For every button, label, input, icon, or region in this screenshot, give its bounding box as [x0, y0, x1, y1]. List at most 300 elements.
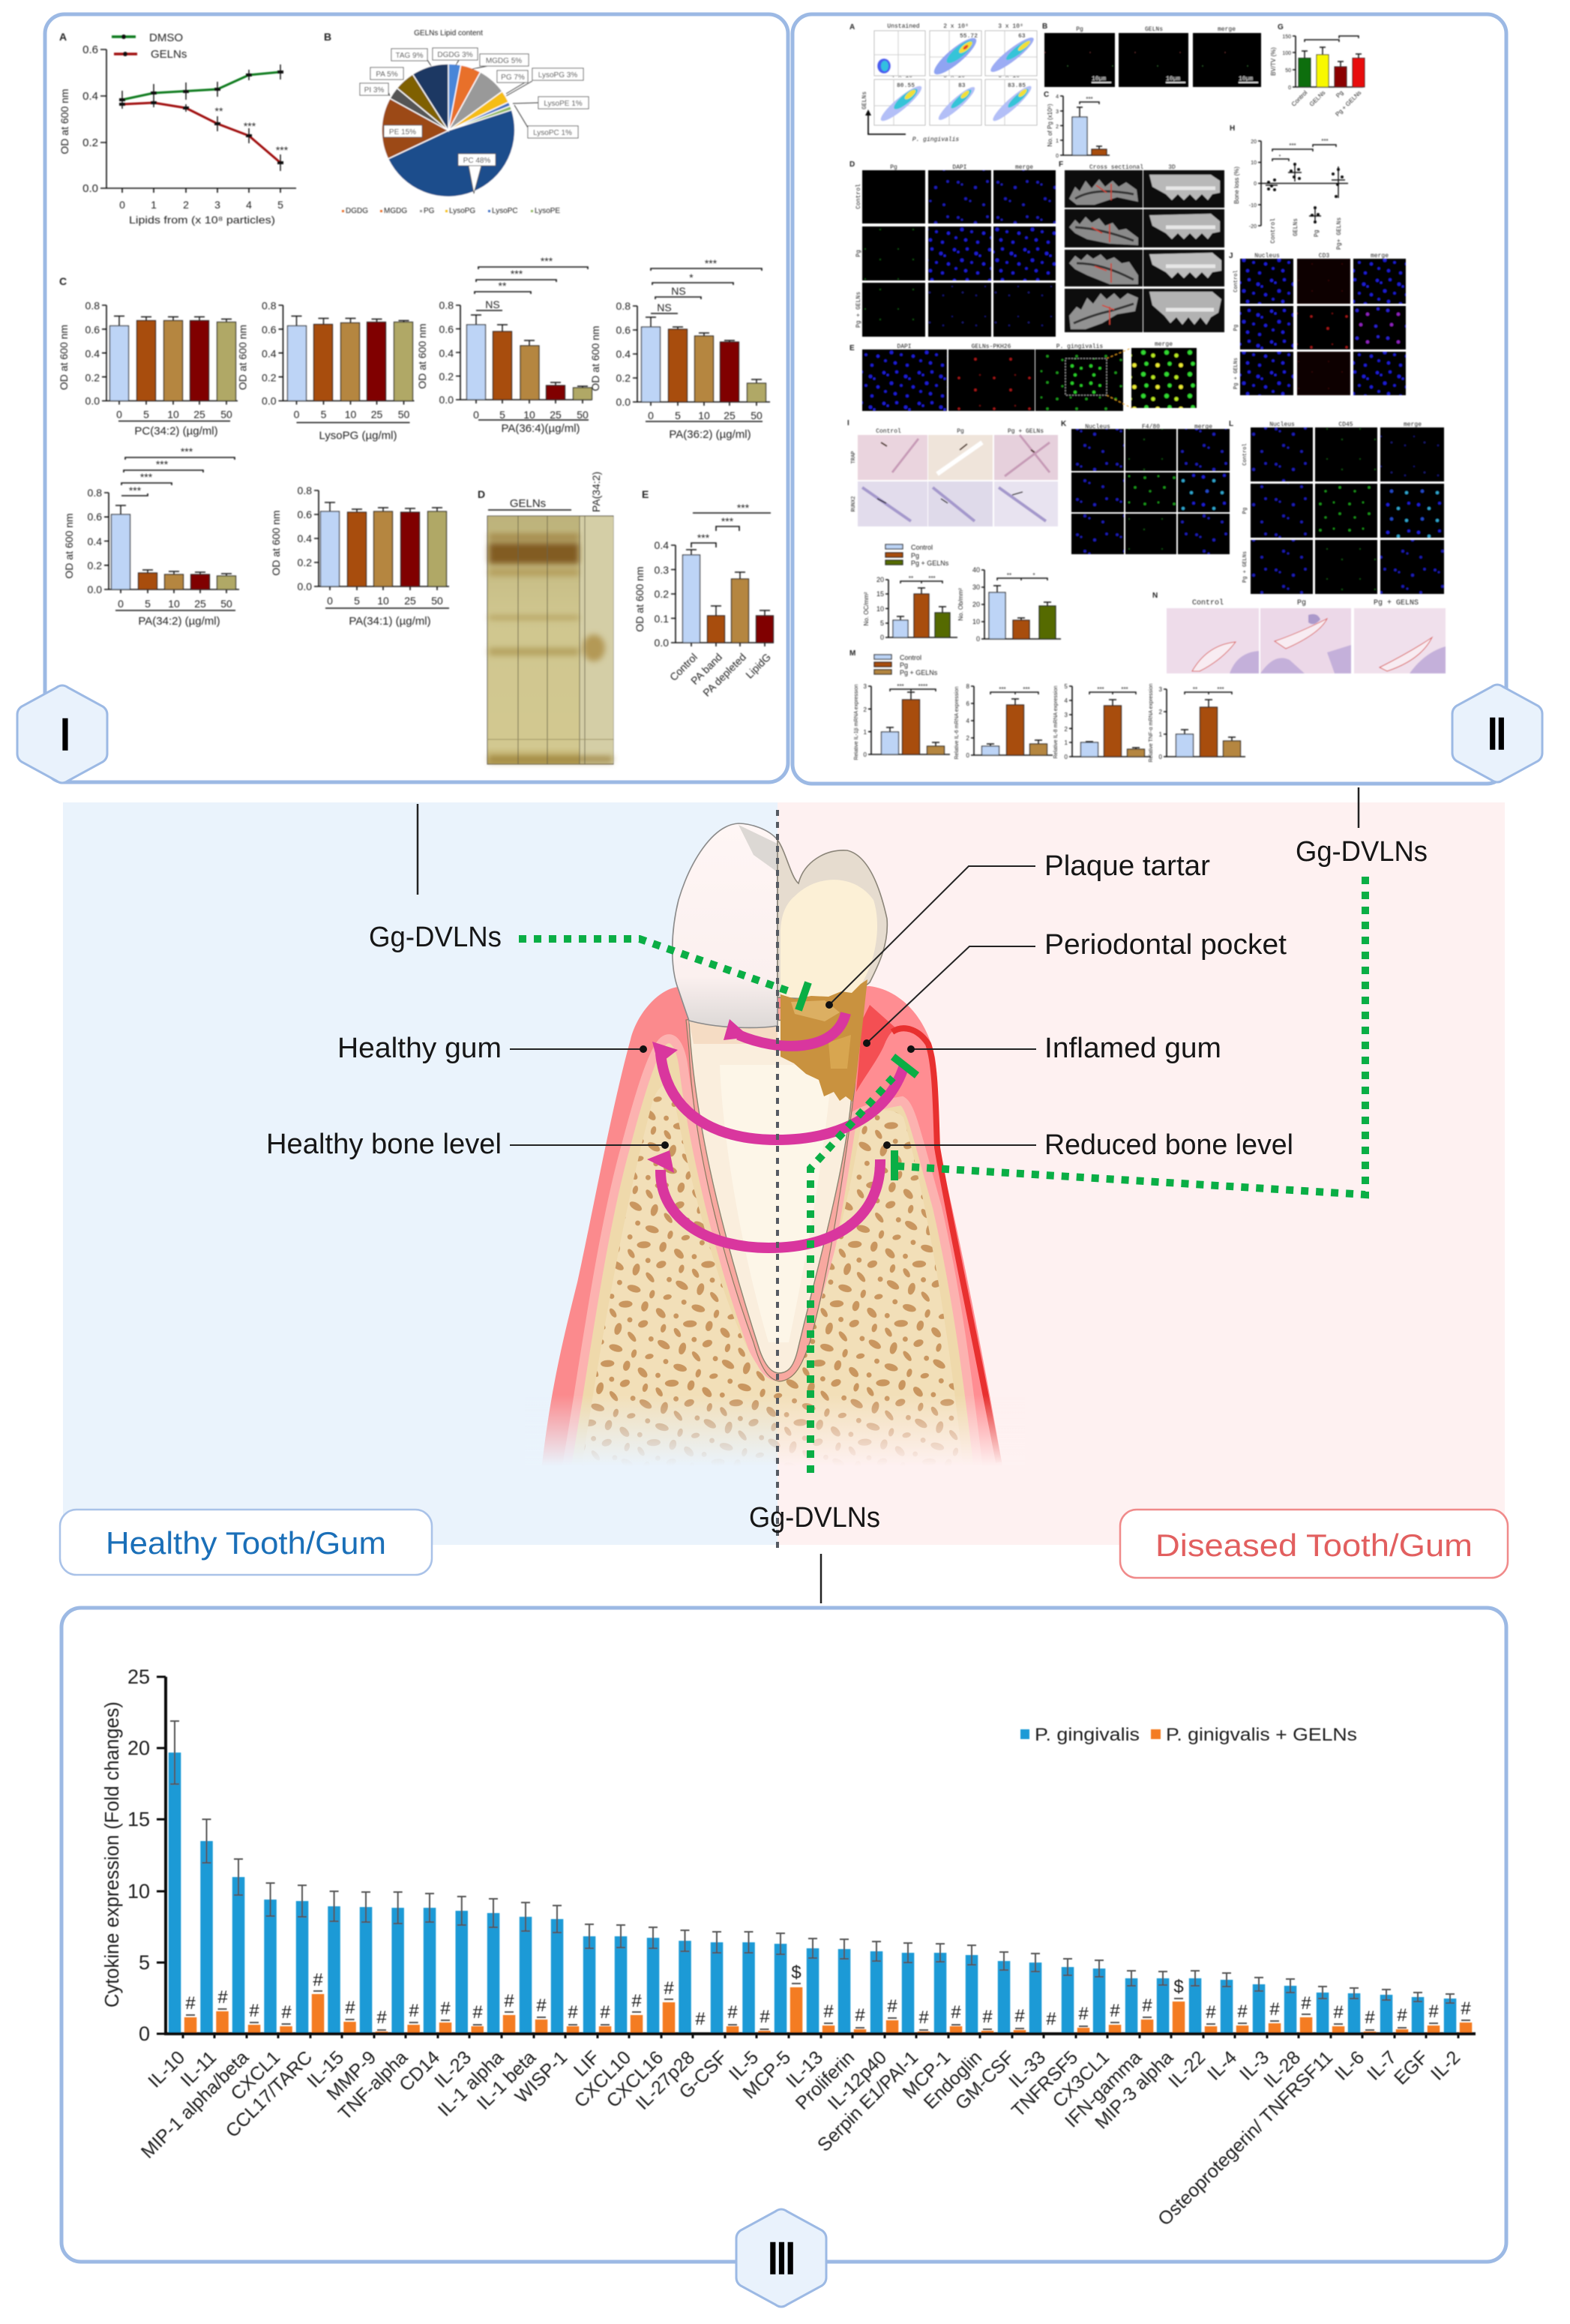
- category labels: IL-12p40: [824, 2047, 891, 2114]
- sub-panel G: BV/TV bars: GELNs: [1308, 89, 1326, 108]
- sub-panel C: Pg counts: 4: [1056, 94, 1059, 100]
- sub-panel G: BV/TV bars: BV/TV (%): [1270, 47, 1277, 76]
- chart A: growth curve: GELNs: [151, 48, 187, 61]
- chart: IL-6 mRNA: 6: [966, 700, 970, 707]
- chart: IL-1 beta mRNA: [854, 683, 950, 760]
- sub-panel L: CD4 staining: Nucleus: [1269, 421, 1295, 428]
- y-axis labels: 20: [127, 1737, 150, 1759]
- chart B: lipid pie: DGDG: [346, 207, 368, 215]
- sub-panel C: Pg counts: [1044, 91, 1110, 159]
- chart B: lipid pie: PA 5%: [376, 70, 398, 79]
- chart: PC(34:2): 10: [167, 408, 179, 420]
- chart: No. Ob/mm2: 20: [972, 601, 980, 608]
- category labels: CXCL1: [226, 2047, 284, 2104]
- sub-panel H: bone loss scatter: Bone loss (%): [1233, 166, 1240, 204]
- significance markers: #: [1142, 1996, 1152, 2016]
- chart: IL-8 mRNA: ***: [1121, 686, 1128, 693]
- chart B: lipid pie: LysoPG 3%: [538, 71, 577, 79]
- chart: PC(34:2): 0.0: [85, 394, 100, 406]
- inflamed pocket: [856, 1005, 897, 1092]
- sub-panel G: BV/TV bars: Pg + GELNs: [1334, 89, 1362, 118]
- chart A: growth curve: 0: [119, 199, 125, 211]
- chart: LysoPG: [237, 300, 414, 442]
- chart: PA(36:2): 0.6: [616, 324, 631, 336]
- chart: No. OC/mm2: ***: [928, 575, 936, 582]
- hexagon badge II: II: [1486, 709, 1504, 759]
- chart: PA(34:2): 0.0: [88, 583, 102, 595]
- category labels: IL-2: [1427, 2047, 1464, 2085]
- chart A: growth curve: 0.2: [82, 136, 98, 149]
- sub-panel H: bone loss scatter: Pg+ GELNs: [1336, 217, 1343, 250]
- inflamed gum outer band: [892, 1028, 999, 1462]
- sub-panel H: bone loss scatter: 10: [1251, 160, 1257, 166]
- y-axis labels: 15: [127, 1808, 150, 1831]
- chart: No. Ob/mm2: *: [1032, 572, 1035, 579]
- button: diseased: Diseased Tooth/Gum: [1155, 1528, 1473, 1563]
- sub-panel K: F4/80 staining: merge: [1194, 424, 1212, 430]
- chart: PA(34:2): 0.2: [88, 559, 102, 571]
- chart D: TLC plate: D: [478, 488, 485, 500]
- chart: No. Ob/mm2: 0: [976, 635, 980, 643]
- chart B: lipid pie: DGDG 3%: [437, 51, 473, 59]
- sub-panel A: flow plots: 4 x 10⁸: [891, 73, 916, 79]
- chart: PA(36:4): ***: [511, 268, 523, 280]
- sub-panel E: co-localisation: DAPI: [897, 343, 912, 350]
- sub-panel L: CD4 staining: [1229, 420, 1444, 594]
- sub-panel A: flow plots: [849, 23, 1037, 143]
- sub-panel K: F4/80 staining: F4/80: [1142, 424, 1160, 430]
- category labels: Endoglin: [920, 2047, 986, 2113]
- button: diseased: [1120, 1510, 1508, 1578]
- significance markers: #: [281, 2002, 292, 2023]
- sub-panel C: Pg counts: No. of Pg (x10⁵): [1047, 103, 1053, 147]
- sub-panel I: histology: RUNX2: [851, 496, 857, 512]
- chart: LysoPG: LysoPG (µg/ml): [319, 429, 397, 442]
- significance markers: #: [887, 1996, 897, 2017]
- chart A: growth curve: 0.6: [82, 43, 98, 56]
- chart B: lipid pie: PG: [424, 207, 435, 215]
- chart: PA(34:1): 0.0: [298, 580, 312, 592]
- y-axis labels: 5: [139, 1951, 150, 1974]
- cytokine bar chart: [102, 1666, 1476, 2230]
- sub-panel D: tissue fluorescence: merge: [1015, 164, 1033, 171]
- category labels: IL-33: [1005, 2047, 1050, 2092]
- sub-panel D: tissue fluorescence: Pg: [855, 250, 862, 257]
- chart: IL-1 beta mRNA: 0: [864, 751, 867, 758]
- chart: PC(34:2): 25: [193, 408, 205, 420]
- chart: LysoPG: 50: [398, 408, 409, 420]
- category labels: IL-3: [1236, 2047, 1273, 2085]
- chart: TNF-alpha mRNA: 3: [1159, 686, 1163, 693]
- chart: PA(34:1): 0: [327, 595, 333, 607]
- chart B: lipid pie: B: [324, 31, 331, 43]
- y-axis labels: 25: [127, 1666, 150, 1688]
- background: healthy side: [63, 802, 778, 1545]
- sub-panel H: bone loss scatter: -20: [1249, 224, 1257, 229]
- chart: PA(36:4): ***: [541, 255, 553, 267]
- sub-panel B: fluorescence: 10µm: [1166, 76, 1180, 82]
- chart: IL-1 beta mRNA: 1: [864, 729, 867, 736]
- chart E: PA fractions: 0.1: [655, 613, 669, 625]
- significance markers: #: [568, 2002, 578, 2023]
- significance markers: #: [982, 2007, 993, 2027]
- connector: panel III to label: [820, 1554, 822, 1603]
- labels: anatomy: Gg-DVLNs: [1296, 836, 1428, 868]
- chart: PA(36:2): PA(36:2) (µg/ml): [669, 428, 751, 441]
- sub-panel G: BV/TV bars: [1270, 23, 1365, 118]
- chart D: TLC plate: [478, 472, 613, 764]
- category labels: CCL17/TARC: [222, 2047, 316, 2142]
- y-axis labels: 10: [127, 1880, 150, 1903]
- sub-panel A: flow plots: 3 x 10⁸: [998, 23, 1023, 30]
- sub-panel N: H and E sections: Pg + GELNS: [1374, 599, 1419, 607]
- sub-panel A: flow plots: GELNs: [861, 91, 868, 109]
- chart: IL-8 mRNA: 3: [1065, 712, 1068, 718]
- y-axis labels: [102, 1666, 150, 2045]
- chart A: growth curve: 3: [214, 199, 220, 211]
- legend: osteoclast charts: Control: [911, 544, 933, 551]
- category labels: Osteoprotegerin/ TNFRSF11: [1154, 2047, 1337, 2230]
- sub-panel C: Pg counts: 0: [1056, 154, 1059, 159]
- background: diseased side: [778, 802, 1505, 1545]
- chart: PA(34:1): 0.2: [298, 556, 312, 568]
- sub-panel I: histology: TRAP: [851, 451, 857, 463]
- chart E: PA fractions: 0.0: [655, 637, 669, 649]
- chart B: lipid pie: GELNs Lipid content: [414, 29, 483, 37]
- chart: PA(36:2): 0.4: [616, 348, 631, 360]
- category labels: IL-6: [1331, 2047, 1368, 2085]
- category labels: MMP-9: [322, 2047, 380, 2104]
- chart: No. OC/mm2: **: [909, 575, 913, 582]
- chart A: growth curve: 1: [151, 199, 157, 211]
- sub-panel E: co-localisation: E: [849, 344, 855, 352]
- sub-panel A: flow plots: 2 x 10⁸: [943, 23, 969, 30]
- chart: PA(36:4): 0.6: [439, 323, 454, 335]
- chart B: lipid pie: MGDG: [384, 207, 407, 215]
- chart: PA(34:1): 5: [354, 595, 360, 607]
- sub-panel G: BV/TV bars: 100: [1282, 51, 1291, 56]
- chart E: PA fractions: [634, 488, 774, 699]
- crown left: [673, 823, 778, 1027]
- category labels: IL-23: [430, 2047, 475, 2092]
- sub-panel M: mRNA legend: Pg + GELNs: [900, 669, 938, 676]
- chart: IL-6 mRNA: 0: [966, 752, 970, 759]
- category labels: GM-CSF: [951, 2047, 1018, 2114]
- significance markers: #: [664, 1978, 674, 1999]
- chart: PA(36:2): 25: [724, 409, 736, 421]
- chart: PA(36:4): 0.8: [439, 299, 454, 311]
- chart: PA(36:2): 0: [648, 409, 654, 421]
- chart: IL-8 mRNA: 4: [1065, 697, 1068, 704]
- blue error bars: [170, 1721, 1455, 2003]
- labels: anatomy: Inflamed gum: [1044, 1033, 1221, 1064]
- chart: PA(36:4): PA(36:4)(µg/ml): [501, 422, 580, 435]
- category labels: G-CSF: [675, 2047, 731, 2103]
- chart: PA(34:1): [270, 484, 449, 628]
- fade at base: [525, 1395, 778, 1479]
- chart: PA(34:2): 5: [145, 598, 151, 610]
- chart: IL-1 beta mRNA: ***: [897, 683, 904, 690]
- category labels: CD14: [395, 2047, 444, 2095]
- sub-panel J: CD3 staining: Pg + GELNs: [1233, 358, 1239, 389]
- chart: PA(36:2): 10: [698, 409, 710, 421]
- category labels: Serpin E1/PAI-1: [813, 2047, 922, 2156]
- sub-panel K: F4/80 staining: Nucleus: [1085, 424, 1110, 430]
- sub-panel J: CD3 staining: CD3: [1319, 253, 1329, 259]
- hexagon badge II: [1452, 685, 1542, 782]
- sub-panel J: CD3 staining: Nucleus: [1254, 253, 1280, 259]
- category labels: IL-4: [1203, 2047, 1241, 2085]
- chart: No. OC/mm2: [863, 575, 957, 641]
- sub-panel F: micro-CT: F: [1059, 160, 1063, 169]
- chart: PA(34:2): PA(34:2) (µg/ml): [138, 615, 220, 628]
- sub-panel D: tissue fluorescence: [849, 160, 1056, 337]
- sub-panel L: CD4 staining: Control: [1242, 443, 1248, 466]
- crown right: [778, 840, 887, 1001]
- sub-panel G: BV/TV bars: G: [1278, 23, 1284, 31]
- sub-panel L: CD4 staining: Pg + GELNs: [1242, 551, 1248, 583]
- sub-panel B: fluorescence: Pg: [1076, 26, 1083, 33]
- chart: PA(36:2): 0.2: [616, 372, 631, 384]
- chart: No. OC/mm2: 10: [876, 605, 884, 613]
- chart: IL-6 mRNA: 2: [966, 735, 970, 742]
- root canal tone: [720, 1065, 832, 1342]
- sub-panel I: histology: Pg: [957, 428, 964, 435]
- chart legend: P. ginigvalis + GELNs: [1166, 1725, 1357, 1745]
- significance markers: #: [1014, 2006, 1025, 2026]
- chart: PA(36:4): 50: [577, 409, 589, 421]
- hexagon badge III: [736, 2209, 826, 2307]
- sub-panel J: CD3 staining: J: [1229, 252, 1233, 260]
- category labels: IL-1 beta: [473, 2047, 540, 2114]
- chart: PA(36:2): 0.8: [616, 300, 631, 312]
- chart: PC(34:2): 0.8: [85, 300, 100, 312]
- chart: No. Ob/mm2: 40: [972, 566, 980, 574]
- magenta arrow: middle: [652, 1042, 904, 1140]
- chart E: PA fractions: 0.2: [655, 588, 669, 600]
- category labels: IL-10: [144, 2047, 189, 2092]
- axes: [166, 1677, 1476, 2034]
- chart: PA(34:2): 50: [220, 598, 232, 610]
- category labels: TNFRSF5: [1008, 2047, 1082, 2122]
- centre divider: [776, 810, 779, 1551]
- sub-panel N: H and E sections: N: [1152, 592, 1158, 600]
- chart: PA(36:2): NS: [657, 301, 672, 313]
- significance markers: #: [600, 2002, 610, 2023]
- chart E: PA fractions: E: [642, 488, 649, 500]
- chart: PA(36:4): 0.2: [439, 370, 454, 382]
- significance markers: #: [951, 2002, 961, 2023]
- chart: PC(34:2): 5: [143, 408, 149, 420]
- sub-panel A: flow plots: 83: [958, 82, 966, 89]
- connector: panel II to label: [1358, 787, 1359, 828]
- chart B: lipid pie: [324, 29, 589, 215]
- chart: PA(36:4): **: [499, 280, 507, 292]
- chart: IL-6 mRNA: 8: [966, 683, 970, 690]
- sub-panel M: mRNA legend: Control: [900, 654, 921, 661]
- chart: No. OC/mm2: 0: [880, 634, 884, 641]
- sub-panel J: CD3 staining: [1229, 252, 1406, 395]
- sub-panel H: bone loss scatter: ***: [1289, 142, 1296, 149]
- orange bars: [184, 1987, 1472, 2034]
- chart: PA(34:2): ***: [156, 458, 169, 470]
- sub-panel I: histology: [847, 419, 1058, 526]
- sub-panel F: micro-CT: [1059, 160, 1224, 332]
- sub-panel J: CD3 staining: merge: [1371, 253, 1389, 259]
- chart: IL-8 mRNA: 5: [1065, 683, 1068, 690]
- sub-panel H: bone loss scatter: [1230, 124, 1348, 250]
- sub-panel I: histology: I: [847, 419, 849, 427]
- chart legend: [1020, 1725, 1357, 1745]
- sub-panel A: flow plots: 55.72: [960, 33, 978, 40]
- category labels: MIP-3 alpha: [1091, 2047, 1177, 2134]
- sub-panel A: flow plots: Unstained: [887, 23, 920, 30]
- gum right half: [778, 986, 1003, 1470]
- chart D: TLC plate: GELNs: [510, 497, 546, 510]
- chart: PC(34:2): 0: [116, 408, 122, 420]
- chart: PA(36:2): ***: [705, 257, 718, 269]
- significance markers: #: [345, 1998, 355, 2018]
- chart B: lipid pie: PG 7%: [501, 73, 525, 82]
- chart E: PA fractions: 0.4: [655, 539, 669, 551]
- sub-panel L: CD4 staining: merge: [1404, 421, 1422, 428]
- chart: PA(34:2): 0.4: [88, 535, 102, 547]
- significance markers: #: [249, 2001, 259, 2021]
- chart: No. OC/mm2: No. OC/mm²: [863, 592, 870, 625]
- significance markers: #: [1461, 1999, 1471, 2019]
- chart: PA(34:2): OD at 600 nm: [63, 513, 75, 579]
- chart E: PA fractions: OD at 600 nm: [634, 566, 646, 632]
- significance markers: #: [1301, 1993, 1311, 2014]
- chart A: growth curve: **: [215, 105, 223, 117]
- chart: PA(34:1): OD at 600 nm: [270, 510, 282, 576]
- sub-panel B: fluorescence: 10µm: [1092, 76, 1106, 82]
- chart: No. Ob/mm2: **: [1007, 572, 1011, 579]
- chart A: growth curve: ***: [244, 120, 256, 132]
- chart A: growth curve: 4: [246, 199, 252, 211]
- sub-panel H: bone loss scatter: -10: [1249, 203, 1257, 208]
- chart: PA(34:1): 25: [404, 595, 416, 607]
- chart: PA(34:1): 0.4: [298, 532, 312, 544]
- chart B: lipid pie: LysoPG: [449, 207, 475, 215]
- chart: LysoPG: 0.4: [262, 348, 277, 360]
- chart: TNF-alpha mRNA: **: [1193, 686, 1197, 693]
- chart: LysoPG: 0.6: [262, 324, 277, 336]
- sub-panel E: co-localisation: [849, 341, 1197, 411]
- sub-panel G: BV/TV bars: 50: [1285, 68, 1291, 73]
- category labels: IL-22: [1164, 2047, 1209, 2092]
- chart: PA(34:2): ***: [129, 484, 142, 496]
- legend: osteoclast charts: Pg: [911, 552, 919, 559]
- periodontal ligament: [686, 997, 862, 1381]
- chart: IL-8 mRNA: ***: [1097, 686, 1104, 693]
- sub-panel H: bone loss scatter: Control: [1270, 218, 1277, 244]
- chart: IL-8 mRNA: Relative IL-8 mRNA expression: [1053, 685, 1059, 759]
- chart B: lipid pie: LysoPC: [492, 207, 518, 215]
- chart: No. Ob/mm2: 30: [972, 583, 980, 591]
- chart: PA(36:2): *: [689, 271, 694, 283]
- chart A: growth curve: ***: [276, 144, 289, 156]
- chart A: growth curve: OD at 600 nm: [58, 88, 70, 154]
- significance markers: #: [695, 2009, 706, 2029]
- sub-panel C: Pg counts: 1: [1056, 139, 1059, 144]
- sub-panel H: bone loss scatter: H: [1230, 124, 1235, 133]
- chart: No. Ob/mm2: [957, 566, 1061, 643]
- chart E: PA fractions: PA depleted: [700, 651, 748, 699]
- chart: PA(34:1): PA(34:1) (µg/ml): [349, 615, 431, 628]
- chart: TNF-alpha mRNA: [1149, 683, 1245, 763]
- hexagon badge I: [17, 685, 107, 783]
- connector: panel I to label: [417, 804, 418, 895]
- bone: [566, 1039, 978, 1470]
- blue bars: [169, 1753, 1456, 2034]
- panel I: lipid analysis: [45, 14, 788, 782]
- sub-panel J: CD3 staining: Control: [1233, 270, 1239, 292]
- chart B: lipid pie: LysoPC 1%: [533, 129, 572, 137]
- sub-panel C: Pg counts: ***: [1086, 96, 1093, 103]
- chart: PC(34:2): 0.6: [85, 324, 100, 336]
- sub-panel D: tissue fluorescence: D: [849, 160, 855, 169]
- significance markers: #: [1110, 2001, 1120, 2021]
- sub-panel H: bone loss scatter: GELNs: [1293, 218, 1299, 236]
- sub-panel G: BV/TV bars: Control: [1290, 89, 1309, 108]
- significance markers: #: [1046, 2009, 1056, 2029]
- category labels: [137, 2047, 1464, 2230]
- legend: osteoclast charts: [885, 544, 949, 567]
- sub-panel H: bone loss scatter: ***: [1321, 138, 1329, 145]
- chart: PA(34:2): 10: [168, 598, 180, 610]
- sub-panel A: flow plots: A: [849, 23, 855, 31]
- sub-panel I: histology: Pg + GELNs: [1008, 428, 1044, 435]
- chart: PC(34:2): 50: [220, 408, 232, 420]
- chart: IL-6 mRNA: ***: [999, 686, 1006, 693]
- chart E: PA fractions: ***: [697, 532, 710, 544]
- chart: LysoPG: 25: [371, 408, 382, 420]
- significance markers: #: [536, 1996, 547, 2016]
- chart: IL-1 beta mRNA: Relative IL-1β mRNA expression: [854, 684, 859, 760]
- green inhibition line: bone: [894, 877, 1365, 1195]
- sub-panel G: BV/TV bars: Pg: [1335, 89, 1344, 99]
- chart: IL-8 mRNA: 0: [1065, 754, 1068, 760]
- category labels: Proliferin: [792, 2047, 858, 2114]
- chart A: growth curve: 0.0: [82, 182, 98, 195]
- category labels: EGF: [1390, 2047, 1432, 2089]
- chart: LysoPG: 10: [345, 408, 356, 420]
- sub-panel E: co-localisation: P. gingivalis: [1056, 343, 1103, 350]
- significance markers: #: [376, 2008, 387, 2028]
- sub-panel G: BV/TV bars: 150: [1282, 34, 1291, 40]
- chart: TNF-alpha mRNA: ***: [1217, 686, 1224, 693]
- sub-panel A: flow plots: 83.85: [1008, 82, 1026, 89]
- sub-panel L: CD4 staining: L: [1229, 420, 1233, 428]
- tooth anatomy illustration: [525, 823, 1025, 1479]
- chart E: PA fractions: LipidG: [743, 651, 773, 681]
- chart: PA(34:1): 10: [377, 595, 389, 607]
- sub-panel F: micro-CT: 3D: [1168, 164, 1176, 171]
- panel II: in vivo results: [792, 14, 1506, 784]
- chart: PA(34:1): 0.8: [298, 484, 312, 496]
- chart B: lipid pie: LysoPE 1%: [544, 100, 583, 108]
- category labels: LIF: [570, 2047, 604, 2081]
- significance markers: $: [791, 1963, 801, 1983]
- chart: PA(36:4): 0.0: [439, 394, 454, 406]
- chart A: growth curve: 2: [183, 199, 189, 211]
- significance markers: #: [855, 2005, 865, 2026]
- gum left half: [541, 987, 778, 1470]
- green inhibition line: gum: [810, 1057, 917, 1473]
- chart: No. OC/mm2: 5: [880, 619, 884, 627]
- sub-panel N: H and E sections: [1152, 592, 1446, 673]
